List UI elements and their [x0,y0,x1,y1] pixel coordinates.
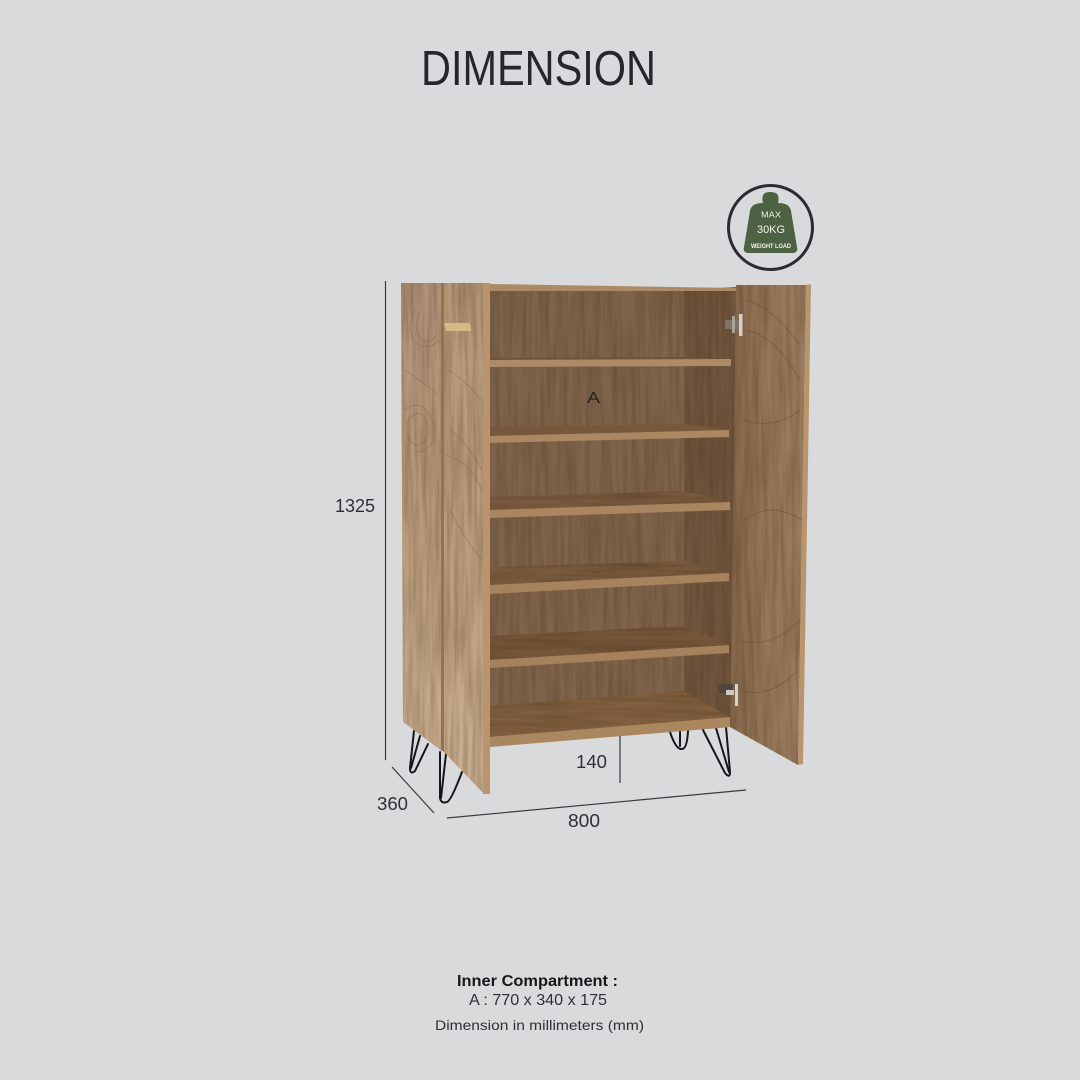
right door edge [798,284,811,765]
shelf 2 [490,424,729,443]
shelf 3 [490,491,730,518]
top board [490,284,737,291]
weight silhouette [744,192,797,253]
dimension line: width 800 [447,790,746,818]
top hinge [725,314,742,336]
weight label text: 30KG [757,224,785,236]
door handle [444,323,471,331]
left side panel [401,283,442,751]
bottom shelf [490,691,731,747]
weight label text: MAX [761,210,781,220]
dimension line: leg height 140 [619,736,621,783]
bottom hinge [719,684,738,706]
shelf 5 [490,626,729,668]
inner compartment note: A : 770 x 340 x 175 [469,992,607,1009]
dimension label: 800: 800 [568,811,600,831]
cabinet [401,283,811,794]
wood grain figures on right door [740,300,802,692]
units note: Dimension in millimeters (mm) [435,1017,644,1033]
left door edge [483,283,490,794]
shelf 4 [490,561,729,594]
icon: max weight load badge [728,186,812,270]
weight label text: WEIGHT LOAD [751,244,792,250]
inner compartment note: Inner Compartment : [457,973,618,990]
left door face [444,283,484,794]
panel joint strip [441,283,444,752]
dimension label: 1325: 1325 [335,496,375,516]
interior right side wall [684,287,737,722]
inner compartment note [457,973,618,1009]
right door inner face [730,285,806,765]
weight label text [751,210,792,250]
shelf 1 [490,357,731,367]
dimension line: depth 360 [392,767,434,813]
wood grain figures on left panels [404,310,482,560]
compartment label A: A [587,390,600,407]
title: DIMENSION [421,42,656,96]
dimension line: height 1325 [384,281,386,760]
interior back panel [490,290,685,710]
dimension label: 140: 140 [576,752,607,772]
hairpin legs [410,727,730,802]
dimension label: 360: 360 [377,794,408,814]
